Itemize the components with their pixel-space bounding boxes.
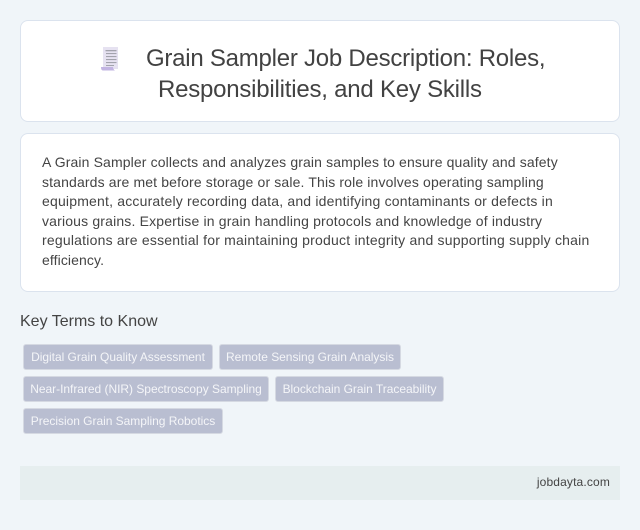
description text: equipment, accurately recording data, and identifying contaminants or defects in (42, 193, 553, 209)
tag list (23, 344, 444, 434)
tag (23, 344, 213, 370)
description text (42, 154, 589, 268)
title (146, 45, 545, 103)
title: Responsibilities, and Key Skills (158, 76, 482, 103)
tag (275, 376, 444, 402)
tag: Remote Sensing Grain Analysis (226, 350, 394, 364)
heading: key terms: Key Terms to Know (20, 313, 158, 330)
icon: document scroll (101, 47, 118, 70)
tag: Near-Infrared (NIR) Spectroscopy Sampling (30, 382, 262, 396)
tag (23, 408, 223, 434)
description text: standards are met before storage or sale. This role involves operating sampling (42, 174, 544, 190)
description text: regulations are essential for maintaining product integrity and supporting supply chain (42, 232, 589, 248)
tag: Precision Grain Sampling Robotics (31, 414, 215, 428)
description text: various grains. Expertise in grain handling protocols and knowledge of industry (42, 212, 542, 228)
panel: description card (20, 133, 620, 292)
footer source text: jobdayta.com (537, 475, 610, 489)
footer bar (20, 466, 620, 500)
description text: efficiency. (42, 252, 104, 268)
tag (23, 376, 269, 402)
title: Grain Sampler Job Description: Roles, (146, 45, 545, 72)
tag: Digital Grain Quality Assessment (31, 350, 205, 364)
tag (219, 344, 401, 370)
tag: Blockchain Grain Traceability (283, 382, 436, 396)
panel: header card (20, 20, 620, 122)
description text: A Grain Sampler collects and analyzes grain samples to ensure quality and safety (42, 154, 558, 170)
